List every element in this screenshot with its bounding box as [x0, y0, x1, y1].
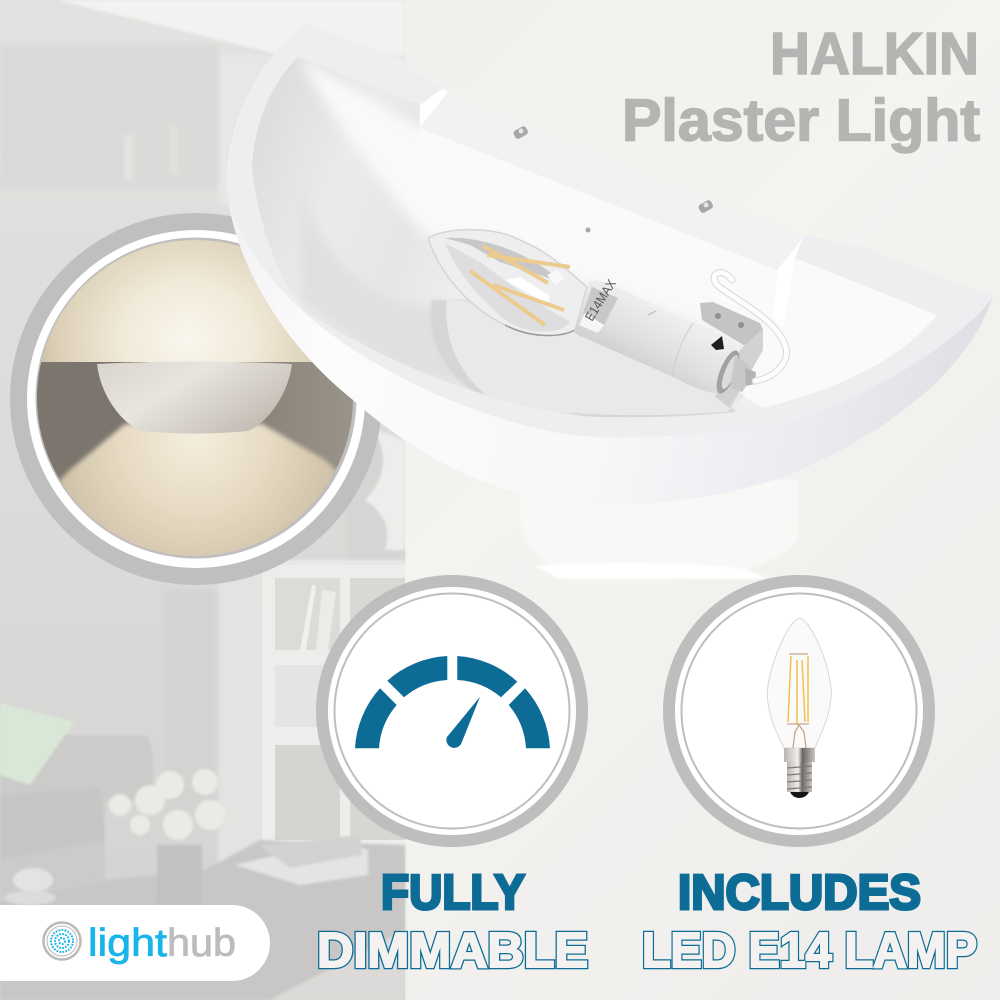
sculpture on shelf: [262, 430, 405, 568]
caption: includes LED E14 lamp: [642, 866, 977, 978]
cable: [714, 273, 787, 381]
threaded ring and nut: [712, 348, 744, 396]
table and floor: [0, 835, 405, 1000]
logo: lighthub: hub: [167, 922, 236, 965]
lamp holder: [574, 273, 787, 396]
back wall highlight: [304, 63, 760, 322]
left circle: lit wall light photo: [10, 213, 382, 585]
caption: includes LED E14 lamp: INCLUDES: [678, 866, 921, 920]
notch highlight: [420, 88, 448, 127]
icon: logo mark: [44, 922, 80, 960]
rim band: [228, 23, 993, 437]
main product: plaster wall light: [227, 23, 993, 505]
floor plate: [446, 300, 745, 415]
badge: dimmable gauge: [316, 575, 588, 847]
icon: filament bulb: [767, 618, 831, 798]
flowers: [109, 769, 225, 840]
caption: fully dimmable: FULLY: [381, 866, 525, 920]
title: [622, 21, 980, 154]
inner bowl: [252, 57, 936, 418]
wedge bracket: [773, 238, 803, 328]
screws: [512, 125, 714, 232]
candle bulb inside light: [428, 230, 587, 335]
sofa: [0, 703, 153, 900]
title: HALKIN: [770, 21, 979, 87]
mounting bracket: [700, 302, 763, 408]
right wall: [740, 258, 937, 410]
caption: includes LED E14 lamp: LED E14 LAMP: [642, 924, 977, 978]
caption: fully dimmable: DIMMABLE: [317, 924, 588, 978]
logo: lighthub: [0, 905, 270, 981]
bookshelf: [262, 565, 405, 855]
lamp holder: E14MAX: [582, 276, 619, 324]
wall light bowl: [97, 362, 292, 434]
floor plate shadow: [431, 300, 740, 420]
lower face of shell: [227, 23, 993, 505]
mounting plate: [418, 92, 803, 270]
wall light reflection: [520, 480, 798, 579]
title: Plaster Light: [622, 88, 980, 154]
icon: gauge: [355, 656, 550, 748]
lower left shading: [304, 229, 462, 386]
badge: LED candle bulb: [663, 575, 935, 847]
caption: fully dimmable: [317, 866, 588, 978]
logo: lighthub: light: [88, 922, 167, 965]
